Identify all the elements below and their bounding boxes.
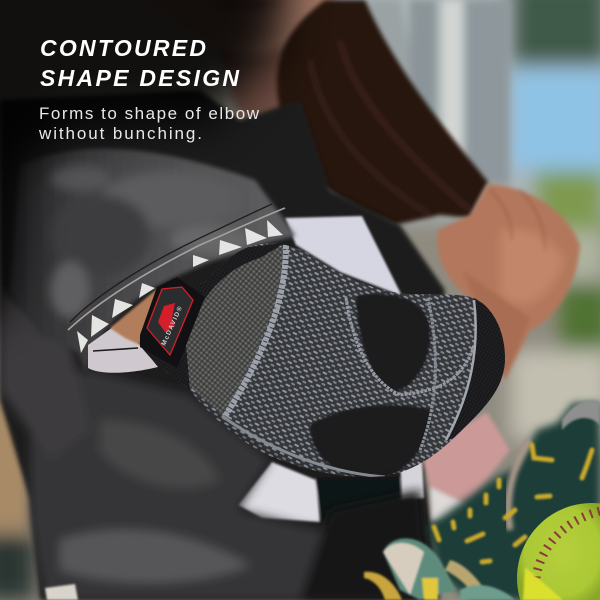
jersey white logo [238, 216, 424, 522]
red logo mark [158, 303, 175, 332]
glove stitching [434, 445, 592, 562]
title: CONTOURED [40, 35, 206, 61]
knit panel: fine grey [185, 246, 284, 415]
description text [38, 104, 260, 143]
hand [437, 184, 580, 380]
red hexagon badge [147, 287, 193, 355]
light seams [346, 298, 474, 395]
forearm lower [420, 412, 510, 522]
glove thumb [364, 538, 515, 600]
black panel: cuff end [448, 298, 510, 440]
brand text: McDAVID® [160, 305, 184, 347]
sleeve inside lining [88, 322, 158, 373]
elbow sleeve [142, 244, 505, 477]
light seam [224, 245, 286, 418]
sleeve cuff seam [68, 208, 285, 330]
black panel: centre [356, 294, 430, 392]
shirt sleeve [10, 149, 296, 373]
softball [517, 503, 600, 600]
hair [277, 0, 488, 225]
bottom white strip [45, 584, 78, 600]
title: SHAPE DESIGN [40, 65, 239, 91]
title [40, 35, 239, 91]
exposed skin under cuff [110, 288, 158, 345]
sleeve label tab [140, 277, 205, 368]
printed shirt lower body [0, 290, 430, 600]
dark gradient overlay [0, 0, 300, 340]
face [130, 0, 340, 120]
sleeve shadow [194, 394, 420, 477]
black jersey [0, 90, 445, 600]
baseball glove [427, 400, 600, 600]
description text: without bunching. [38, 124, 202, 143]
black panel: lower [310, 405, 432, 480]
sleeve cuff triangles [77, 220, 283, 353]
description text: Forms to shape of elbow [39, 104, 260, 123]
